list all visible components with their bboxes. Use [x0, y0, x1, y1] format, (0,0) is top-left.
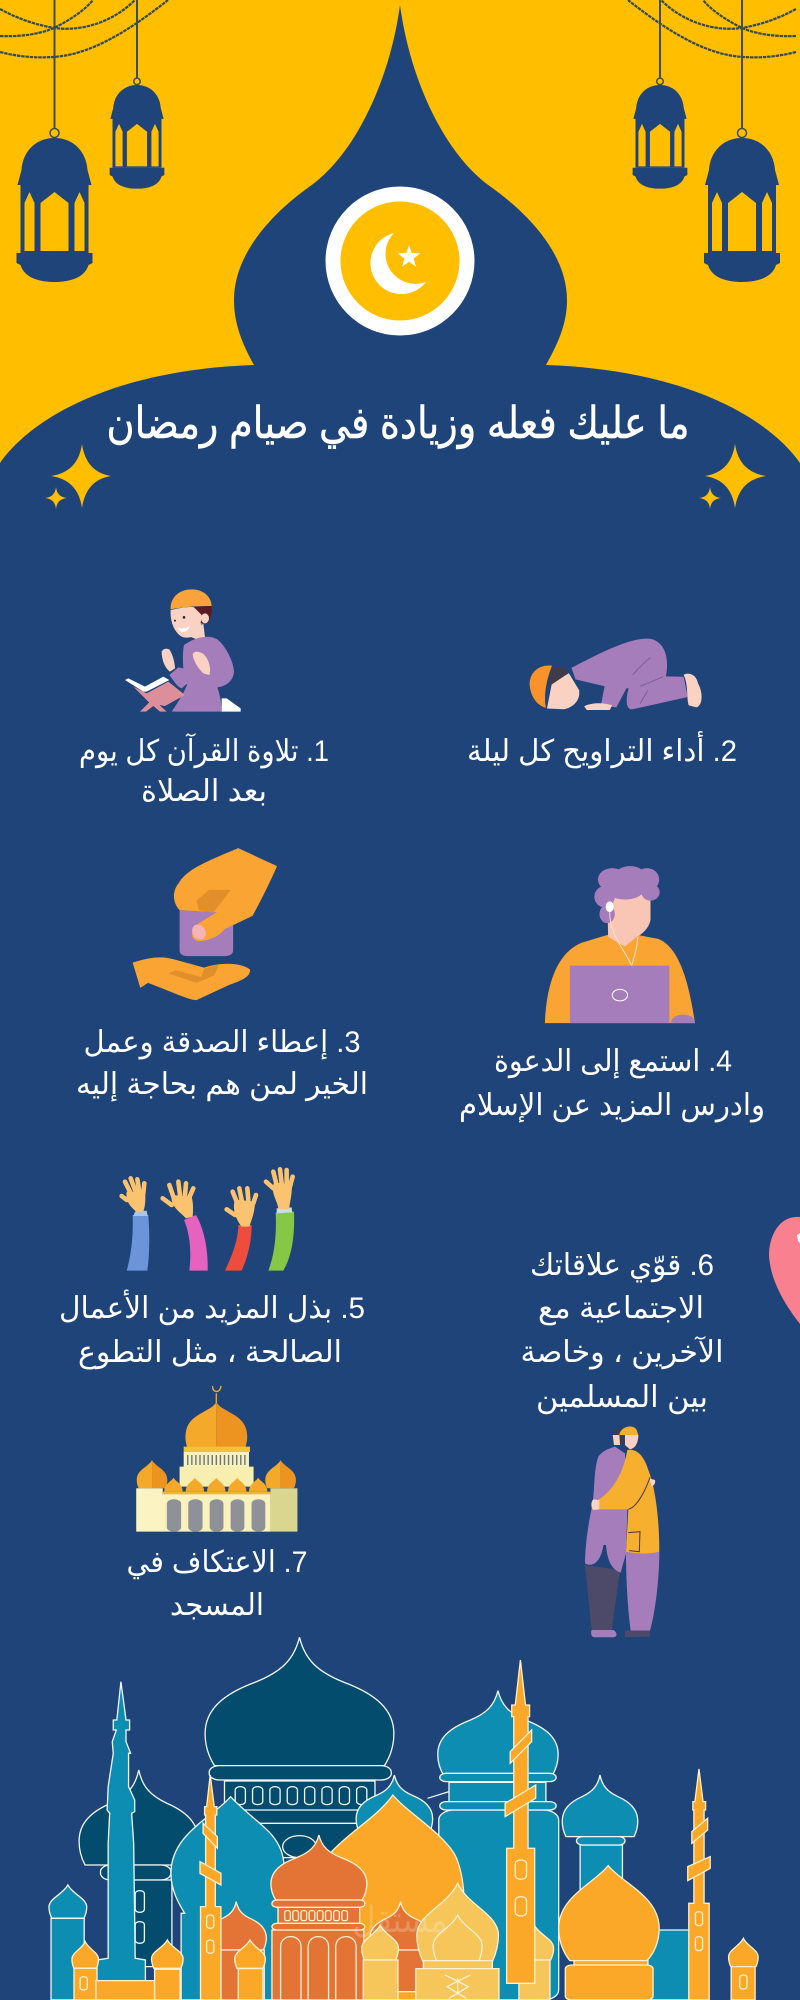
header: yellow panel with dome silhouette — [0, 0, 800, 520]
left dark dome — [79, 1770, 198, 1967]
large orange dome — [324, 1795, 464, 2000]
text: item 5 — [59, 1288, 365, 1369]
decoration: right hanging lanterns — [628, 0, 796, 282]
orange minarets — [200, 1660, 710, 2000]
icon: crescent and star medallion — [326, 186, 474, 336]
text: item 6 — [520, 1249, 724, 1414]
icon: two men hugging — [585, 1426, 659, 1637]
text: item 4: وادرس المزيد عن الإسلام — [459, 1089, 765, 1123]
large right orange dome — [559, 1866, 659, 2000]
light yellow domes — [362, 1883, 554, 2000]
left teal pointed dome — [171, 1797, 316, 2000]
deep orange domes — [206, 1835, 431, 2000]
text: item 4: 4. استمع إلى الدعوة — [494, 1045, 732, 1079]
text: item 4 — [459, 1045, 765, 1123]
text: item 6: بين المسلمين — [536, 1381, 708, 1414]
icon: small mosque — [136, 1386, 297, 1532]
icon: man in prostration — [530, 639, 702, 710]
text: item 5: الصالحة ، مثل التطوع — [78, 1336, 342, 1369]
text: item 5: 5. بذل المزيد من الأعمال — [59, 1288, 365, 1325]
icon: person with laptop and earphones — [545, 866, 695, 1023]
text: item 6: 6. قوّي علاقاتك — [530, 1249, 714, 1282]
teal left small tower — [49, 1885, 87, 2000]
teal tall minaret — [97, 1682, 145, 1983]
text: item 7: 7. الاعتكاف في — [126, 1546, 308, 1580]
decoration: left hanging lanterns — [0, 0, 168, 282]
text: item 7: المسجد — [170, 1589, 264, 1622]
text: item 6: الآخرين ، وخاصة — [520, 1335, 724, 1370]
illustration: colourful mosque skyline — [49, 1637, 758, 2000]
icon: hands giving charity — [133, 848, 277, 1000]
text: item 3: 3. إعطاء الصدقة وعمل — [84, 1026, 360, 1060]
text: item 3: الخير لمن هم بحاجة إليه — [76, 1068, 368, 1102]
text: item 1: 1. تلاوة القرآن كل يوم — [79, 733, 329, 769]
icon: boy reading Quran — [125, 589, 241, 712]
icon: right sparkle stars — [699, 444, 766, 509]
text: item 7 — [126, 1546, 308, 1622]
text: item 1: بعد الصلاة — [141, 775, 267, 808]
text: item 6: الاجتماعية مع — [538, 1292, 704, 1326]
text: item 2: 2. أداء التراويح كل ليلة — [467, 730, 737, 769]
icon: left sparkle stars — [45, 444, 111, 509]
watermark: مستقل — [352, 1899, 448, 1940]
icon: raised hands — [122, 1169, 294, 1271]
text: item 3 — [76, 1026, 368, 1102]
small foreground towers — [72, 1938, 758, 2000]
title: ما عليك فعله وزيادة في صيام رمضان — [106, 399, 690, 449]
text: item 1 — [79, 733, 329, 808]
icon: pink heart at right edge — [769, 1217, 800, 1324]
right teal domes — [356, 1691, 690, 2000]
central dark dome — [205, 1637, 394, 1858]
